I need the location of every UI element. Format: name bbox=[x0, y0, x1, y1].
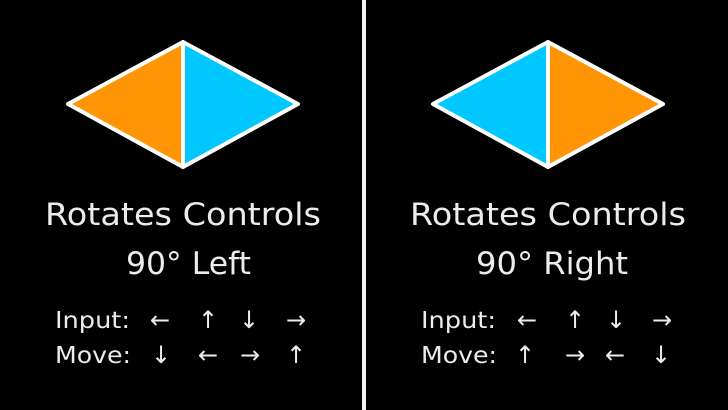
mapping table: left: Input: bbox=[55, 308, 130, 334]
mapping table: left bbox=[55, 306, 306, 369]
mapping table: right: → bbox=[565, 341, 585, 369]
mapping table: left: ← bbox=[150, 306, 170, 334]
heading: right: Rotates Controls bbox=[410, 197, 686, 233]
heading: left: Rotates Controls bbox=[45, 197, 321, 233]
mapping table: left: ← bbox=[198, 341, 218, 369]
mapping table: right: Input: bbox=[421, 308, 496, 334]
mapping table: right: ← bbox=[517, 306, 537, 334]
heading: left bbox=[45, 197, 321, 282]
mapping table: left: → bbox=[240, 341, 260, 369]
icon: diamond right bbox=[433, 42, 663, 167]
mapping table: left: ↑ bbox=[198, 306, 218, 334]
heading: right bbox=[410, 197, 686, 282]
mapping table: right: Move: bbox=[421, 343, 497, 369]
mapping table: right: ↓ bbox=[606, 306, 626, 334]
heading: right: 90° Right bbox=[476, 246, 628, 282]
mapping table: left: → bbox=[286, 306, 306, 334]
mapping table: right: ← bbox=[605, 341, 625, 369]
mapping table: left: ↑ bbox=[286, 341, 306, 369]
mapping table: right: ↑ bbox=[565, 306, 585, 334]
mapping table: right: ↓ bbox=[651, 341, 671, 369]
icon: diamond left bbox=[68, 42, 298, 167]
mapping table: right: ↑ bbox=[515, 341, 535, 369]
panel: rotate left bbox=[45, 42, 321, 369]
panel: rotate right bbox=[410, 42, 686, 369]
mapping table: right: → bbox=[652, 306, 672, 334]
mapping table: right bbox=[421, 306, 672, 369]
mapping table: left: ↓ bbox=[151, 341, 171, 369]
mapping table: left: Move: bbox=[55, 343, 131, 369]
heading: left: 90° Left bbox=[126, 246, 251, 282]
mapping table: left: ↓ bbox=[239, 306, 259, 334]
